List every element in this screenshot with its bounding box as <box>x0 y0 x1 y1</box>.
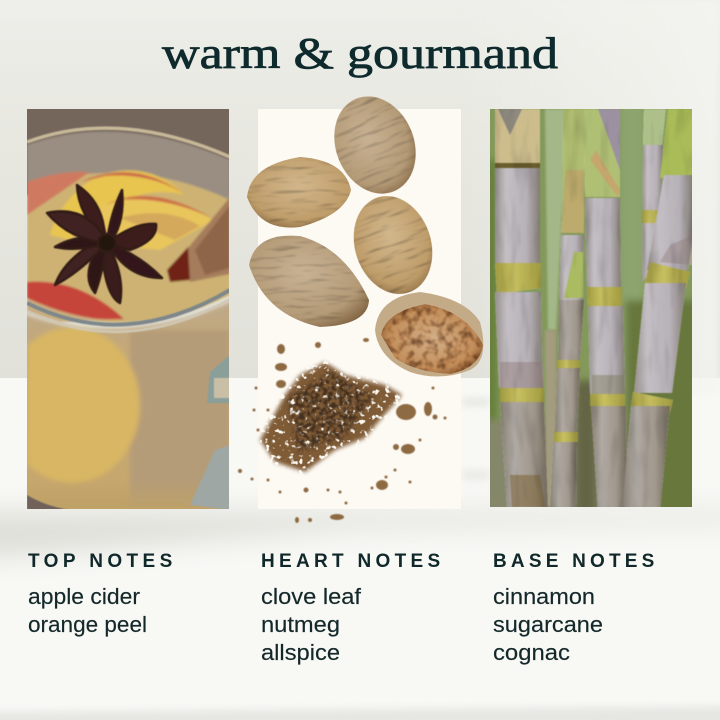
heading: base notes: BASE NOTES <box>493 551 659 572</box>
glass rims <box>27 128 230 157</box>
list: heart notes <box>261 584 362 665</box>
heading: heart notes: HEART NOTES <box>261 551 444 572</box>
wood backdrop <box>27 109 229 196</box>
stalk: right <box>660 109 693 178</box>
icon: sugarcane stalks <box>495 109 693 510</box>
icon: nutmeg seeds <box>247 84 483 377</box>
icon: ground nutmeg <box>238 338 446 523</box>
stalk: center <box>583 109 620 197</box>
icon: red apple slice <box>27 282 124 322</box>
panel: heart notes photo <box>238 84 483 523</box>
leaf <box>545 109 567 330</box>
stalk: left <box>495 109 540 163</box>
title: warm & gourmand <box>162 29 558 78</box>
heading: top notes: TOP NOTES <box>28 551 177 572</box>
list: top notes: orange peel <box>28 612 147 637</box>
icon: star anise <box>47 185 162 303</box>
column: top notes text <box>28 551 177 637</box>
list: base notes <box>493 584 603 665</box>
list: base notes: cognac <box>493 640 570 665</box>
cider surface <box>27 173 230 323</box>
glass interior <box>27 132 230 205</box>
column: heart notes text <box>261 551 444 665</box>
blurred foliage backdrop <box>490 109 692 507</box>
icon: cinnamon stick <box>167 197 230 282</box>
panel: top notes photo <box>27 109 229 509</box>
stalk: far right <box>643 109 666 145</box>
list: top notes <box>28 584 147 637</box>
list: heart notes: clove leaf <box>261 584 362 609</box>
list: base notes: sugarcane <box>493 612 603 637</box>
stalk: thin <box>562 109 584 215</box>
list: base notes: cinnamon <box>493 584 595 609</box>
list: heart notes: nutmeg <box>261 612 340 637</box>
mug body <box>27 300 229 509</box>
icon: apple slices <box>50 170 214 250</box>
list: top notes: apple cider <box>28 584 140 609</box>
cut nutmeg <box>375 292 483 377</box>
mug handle <box>207 355 230 403</box>
panel: base notes photo <box>490 109 692 507</box>
list: heart notes: allspice <box>261 640 340 665</box>
column: base notes text <box>493 551 659 665</box>
icon: lemon slice in mug <box>27 326 142 483</box>
